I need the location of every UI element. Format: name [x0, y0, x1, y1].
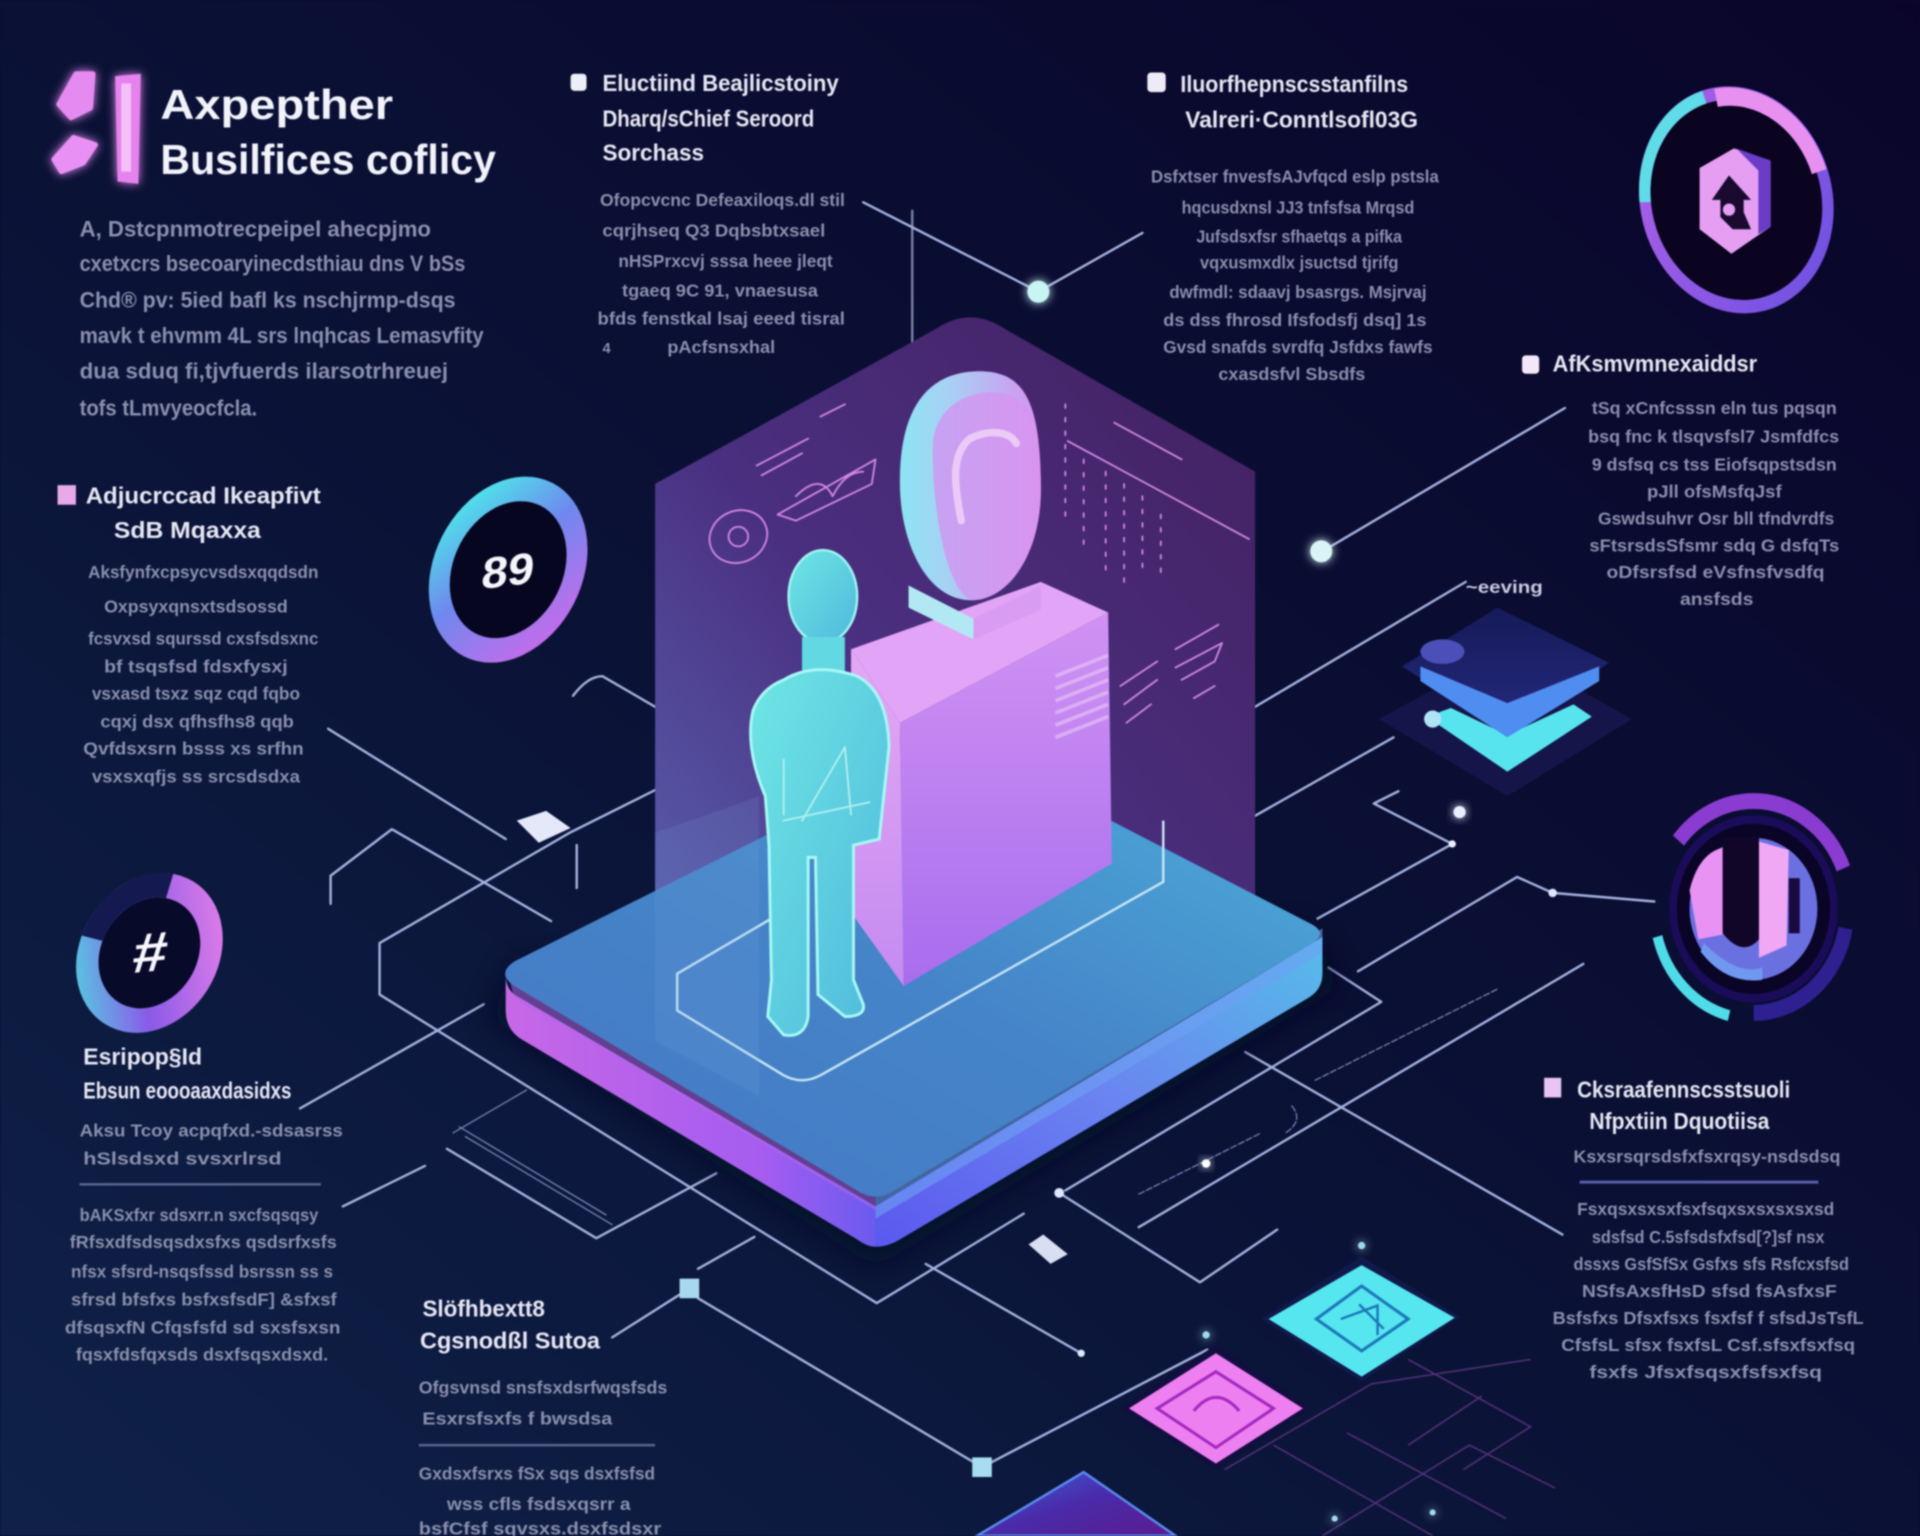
heading — [420, 1296, 600, 1353]
robot head — [900, 371, 1041, 639]
body text: Aksfynfxcpsycvsdsxqqdsdn — [88, 562, 318, 582]
bullet — [1522, 355, 1539, 374]
title: Busilfices coflicy — [160, 136, 496, 183]
body text: sdsfsd C.5sfsdsfxfsd[?]sf nsx — [1592, 1227, 1825, 1247]
lower layer — [1379, 649, 1632, 796]
glow accents — [1202, 1242, 1436, 1522]
platform left bevel — [509, 980, 876, 1210]
logo icon — [54, 74, 141, 184]
heading: Iluorfhepnscsstanfilns — [1180, 71, 1408, 97]
translucent wall front over platform — [655, 796, 759, 1096]
sub text — [80, 1121, 343, 1169]
section: top centre-left — [571, 70, 845, 357]
body text — [419, 1463, 661, 1536]
body text: vqxusmxdlx jsuctsd tjrifg — [1200, 252, 1398, 272]
cyan arc — [1654, 799, 1853, 1019]
body text: bf tsqsfsd fdsxfysxj — [104, 656, 288, 676]
pink pedestal — [851, 582, 1112, 986]
heading: Eluctiind Beajlicstoiny — [602, 70, 839, 96]
body text: nfsx sfsrd-nsqsfssd bsrssn ss s — [71, 1261, 333, 1281]
purple arc — [1656, 801, 1850, 1017]
cyan chevron — [1427, 704, 1592, 772]
body text: vsxsxqfjs ss srcsdsdxa — [92, 767, 300, 787]
body text: bAKSxfxr sdsxrr.n sxcfsqsqsy — [80, 1205, 318, 1225]
section: right lower — [1544, 1076, 1864, 1382]
body text — [83, 562, 318, 787]
title: Axpepther — [160, 81, 393, 128]
body text: Gswdsuhvr Osr bll tfndvrdfs — [1598, 508, 1834, 528]
icon: sphere ring right — [1654, 799, 1853, 1019]
section: left lower — [65, 1043, 343, 1365]
icon: star ring: # — [129, 919, 169, 985]
heading — [602, 70, 839, 166]
icon: star ring — [50, 849, 248, 1057]
body text: cqxj dsx qfhsfhs8 qqb — [100, 712, 294, 732]
section: top centre-right — [1147, 71, 1439, 384]
node dots — [517, 281, 1557, 1477]
heading: Cgsnodßl Sutoa — [420, 1327, 600, 1353]
body text: dssxs GsfSfSx Gsfxs sfs Rsfcxsfsd — [1573, 1254, 1849, 1274]
body text: ansfsds — [1680, 589, 1754, 609]
wall sketches — [701, 404, 1249, 723]
body text: cxasdsfvl Sbsdfs — [1218, 364, 1365, 384]
sub text — [419, 1378, 667, 1428]
sub text: Aksu Tcoy acpqfxd.-sdsasrss — [80, 1121, 343, 1141]
heading: Cksraafennscsstsuoli — [1577, 1076, 1790, 1102]
body text: Ofopcvcnc Defeaxiloqs.dl stil — [600, 190, 845, 210]
body text: fcsvxsd squrssd cxsfsdsxnc — [88, 628, 318, 648]
icon: stacked layers — [1379, 608, 1632, 796]
body text: vsxasd tsxz sqz cqd fqbo — [92, 683, 300, 703]
heading: Esripop§Id — [83, 1043, 202, 1069]
body text: bfds fenstkal lsaj eeed tisral — [598, 309, 845, 329]
connector lines — [300, 202, 1654, 1467]
body text: Gvsd snafds svrdfq Jsfdxs fawfs — [1163, 337, 1433, 357]
body text: Dsfxtser fnvesfsAJvfqcd eslp pstsla — [1151, 167, 1439, 187]
cyan arc — [1622, 73, 1850, 326]
bullet — [1544, 1078, 1561, 1097]
body text: Qvfdsxsrn bsss xs srfhn — [83, 739, 304, 759]
heading: Adjucrccad Ikeapfivt — [86, 483, 321, 509]
body text: fqsxfdsfqxsds dsxfsqsxdsxd. — [76, 1345, 328, 1365]
cyan person figure — [751, 550, 889, 1035]
body text: cqrjhseq Q3 Dqbsbtxsael — [602, 221, 825, 241]
upper layer — [1402, 608, 1609, 734]
sub text: Ofgsvnsd snsfsxdsrfwqsfsds — [419, 1378, 667, 1398]
section: left middle — [58, 483, 321, 787]
body text — [1151, 167, 1439, 384]
body text: oDfsrsfsd eVsfnsfvsdfq — [1607, 562, 1824, 582]
navy arc — [1660, 805, 1847, 1013]
platform right bevel — [876, 928, 1322, 1219]
icon: 89 ring — [400, 452, 616, 688]
platform left face — [506, 971, 876, 1247]
heading: Sorchass — [602, 140, 704, 166]
heading — [83, 1043, 291, 1104]
body text: ds dss fhrosd Ifsfodsfj dsq] 1s — [1163, 310, 1427, 330]
body text: hqcusdxnsl JJ3 tnfsfsa Mrqsd — [1182, 197, 1414, 217]
body text: nHSPrxcvj sssa heee jleqt — [618, 251, 833, 271]
sub text: Esxrsfsxfs f bwsdsa — [422, 1408, 612, 1428]
heading: Ebsun eoooaaxdasidxs — [83, 1078, 291, 1104]
intro text block: Chd® pv: 5ied bafl ks nschjrmp-dsqs — [80, 288, 456, 313]
heading: Nfpxtiin Dquotiisa — [1589, 1108, 1770, 1134]
body text: Gxdsxfsrxs fSx sqs dsxfsfsd — [419, 1463, 655, 1483]
platform — [505, 745, 1322, 1247]
body text: Bsfsfxs Dfsxfsxs fsxfsf f sfsdJsTsfL — [1553, 1308, 1864, 1328]
icon: shield ring top right — [1622, 73, 1850, 326]
title — [160, 81, 496, 183]
body text: fRfsxdfsdsqsdxsfxs qsdsrfxsfs — [70, 1232, 337, 1252]
bullet — [1147, 72, 1166, 92]
tile: purple cube, bottom — [977, 1472, 1176, 1536]
body text: sFtsrsdsSfsmr sdq G dsfqTs — [1589, 535, 1839, 555]
shield — [1700, 148, 1771, 254]
heading: AfKsmvmnexaiddsr — [1553, 350, 1757, 376]
icon: 89 ring: 89 — [479, 542, 537, 599]
heading — [1577, 1076, 1790, 1134]
body text: dfsqsxfN Cfqsfsfd sd sxsfsxsn — [65, 1318, 340, 1338]
body text: pAcfsnsxhal — [667, 337, 775, 357]
body text: bsq fnc k tlsqvsfsl7 Jsmfdfcs — [1588, 426, 1839, 446]
platform shadow — [490, 931, 1341, 1268]
collar — [909, 586, 973, 639]
platform top face — [505, 745, 1320, 1197]
thin purple network, lower right — [1224, 1359, 1555, 1536]
pale panel on pedestal — [1056, 655, 1108, 737]
heading — [1180, 71, 1418, 133]
body text: 4 — [602, 341, 611, 357]
section: bottom centre-left — [419, 1296, 667, 1536]
heading — [86, 483, 321, 543]
body text: fsxfs Jfsxfsqsxfsfsxfsq — [1589, 1362, 1822, 1382]
body text: wss cfls fsdsxqsrr a — [446, 1494, 631, 1514]
body text: Oxpsyxqnsxtsdsossd — [104, 596, 288, 616]
body text — [65, 1205, 340, 1365]
sub text: hSlsdsxd svsxrlrsd — [83, 1149, 282, 1169]
heading: Dharq/sChief Seroord — [602, 105, 814, 131]
heading: Slöfhbextt8 — [422, 1296, 545, 1322]
sub text: Ksxsrsqrsdsfxfsxrqsy-nsdsdsq — [1573, 1146, 1840, 1166]
body text: pJll ofsMsfqJsf — [1647, 481, 1782, 501]
body text: tgaeq 9C 91, vnaesusa — [622, 281, 818, 301]
body text: dwfmdl: sdaavj bsasrgs. Msjrvaj — [1169, 282, 1427, 302]
small label by layers icon: ~eeving — [1466, 577, 1543, 597]
intro text block — [80, 217, 484, 420]
body text: 9 dsfsq cs tss Eiofsqpstsdsn — [1592, 454, 1837, 474]
body text: Fsxqsxsxsxfsxfsqxsxsxsxsxsd — [1577, 1199, 1834, 1219]
body text: Jufsdsxfsr sfhaetqs a pifka — [1196, 227, 1402, 247]
intro text block: dua sduq fi,tjvfuerds ilarsotrhreuej — [80, 359, 448, 384]
intro text block: tofs tLmvyeocfcla. — [80, 395, 257, 420]
platform right face — [876, 937, 1322, 1247]
pink arc — [1626, 78, 1846, 322]
section: right upper — [1522, 350, 1839, 609]
body text: tSq xCnfcsssn eln tus pqsqn — [1592, 398, 1837, 418]
bullet — [58, 485, 76, 505]
intro text block: cxetxcrs bsecoaryinecdsthiau dns V bSs — [80, 251, 465, 276]
intro text block: mavk t ehvmm 4L srs lnqhcas Lemasvfity — [80, 323, 484, 348]
blue chevron — [1420, 666, 1599, 737]
bullet — [571, 74, 587, 91]
body text: NSfsAxsfHsD sfsd fsAsfxsF — [1582, 1281, 1837, 1301]
body text — [598, 190, 845, 357]
body text: sfrsd bfsfxs bsfxsfsdF] &sfxsf — [71, 1290, 337, 1310]
intro text block: A, Dstcpnmotrecpeipel ahecpjmo — [80, 217, 431, 242]
holographic wall panel — [655, 317, 1255, 1041]
body text — [1553, 1199, 1864, 1382]
heading: SdB Mqaxxa — [114, 517, 261, 543]
heading: Valreri·Conntlsofl03G — [1185, 107, 1418, 133]
inner sphere — [1690, 838, 1817, 980]
tile: cyan diamond — [1261, 1257, 1460, 1381]
body text: CfsfsL sfsx fsxfsL Csf.sfsxfsxfsq — [1561, 1335, 1855, 1355]
body text — [1588, 398, 1839, 609]
tile: pink diamond — [1120, 1345, 1310, 1470]
